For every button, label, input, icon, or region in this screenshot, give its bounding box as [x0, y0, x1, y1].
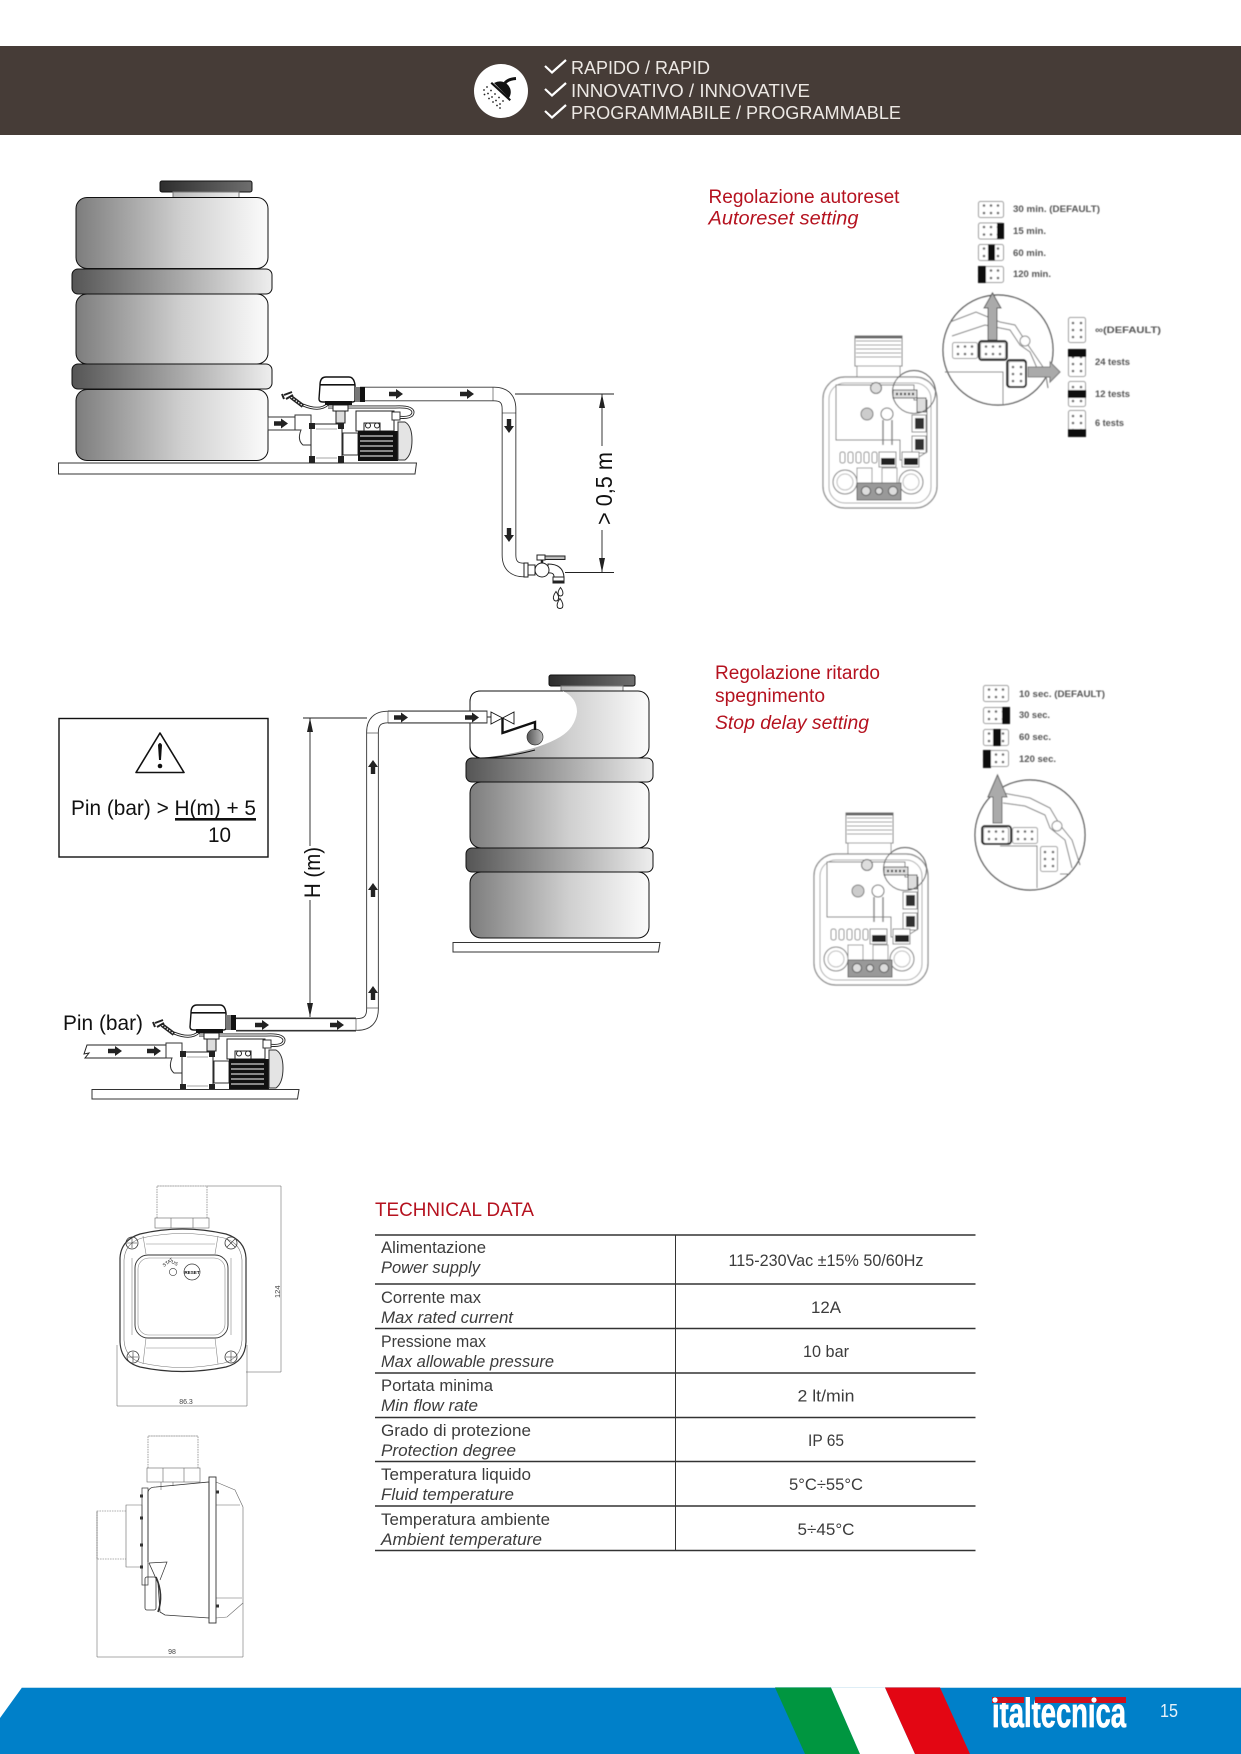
test count legend: 12 tests: [1095, 389, 1130, 400]
icon: warning triangle: [136, 733, 184, 772]
autoreset time legend: 60 min.: [1013, 248, 1046, 259]
test count legend: [1068, 318, 1161, 437]
magnified circle: [975, 775, 1085, 890]
feature list: PROGRAMMABILE / PROGRAMMABLE: [571, 102, 901, 123]
stop delay legend: 30 sec.: [1019, 710, 1050, 721]
heading: technical data: TECHNICAL DATA: [375, 1200, 534, 1221]
feature list: [545, 57, 901, 123]
autoreset time legend: 120 min.: [1013, 269, 1051, 280]
row: ambient temperature: [380, 1510, 854, 1549]
row: fluid temperature: Temperatura liquido: [381, 1465, 531, 1484]
dimension: width 86.3: 86.3: [179, 1399, 193, 1406]
float valve: [487, 712, 543, 745]
technical drawing: front view: [117, 1186, 282, 1406]
row: protection degree: IP 65: [808, 1431, 844, 1450]
technical drawing: side view: [97, 1436, 243, 1657]
tank: [72, 181, 272, 460]
dimension: depth 98: [97, 1559, 243, 1657]
dimension: greater than 0.5 m: > 0,5 m: [591, 452, 617, 525]
dimension: greater than 0.5 m: [515, 394, 617, 572]
dimension: H (m): H (m): [300, 847, 325, 898]
tank with float valve: [466, 675, 653, 938]
inlet pipe: [84, 1045, 172, 1058]
autoreset time legend: [978, 202, 1100, 283]
feature list: INNOVATIVO / INNOVATIVE: [571, 80, 810, 101]
row: max allowable pressure: Pressione max: [381, 1332, 486, 1351]
row: max allowable pressure: [381, 1332, 849, 1371]
italian flag stripes: [775, 1688, 970, 1754]
controller board: [814, 813, 928, 985]
technical drawing: front view: US: [170, 1259, 179, 1268]
pump with controller: [282, 377, 413, 463]
autoreset time legend: 30 min. (DEFAULT): [1013, 204, 1100, 215]
diagram: pump filling raised tank: [63, 675, 660, 1099]
row: protection degree: Grado di protezione: [381, 1421, 531, 1440]
row: max allowable pressure: Max allowable pressure: [381, 1352, 554, 1371]
row: power supply: Power supply: [381, 1258, 481, 1277]
magnified circle: [943, 293, 1060, 405]
row: fluid temperature: [381, 1465, 863, 1504]
row: protection degree: Protection degree: [381, 1441, 516, 1460]
stop delay legend: 10 sec. (DEFAULT): [1019, 689, 1105, 700]
row: power supply: [381, 1238, 924, 1277]
heading: stop delay setting: Regolazione ritardo: [715, 663, 880, 684]
diagram: tank above pump with tap: [58, 181, 617, 608]
riser pipe: [236, 711, 487, 1031]
warning box: [59, 718, 268, 857]
technical drawing: front view: STAT: [162, 1257, 175, 1269]
pump base slab: [92, 1090, 299, 1099]
footer band: [0, 1688, 1241, 1754]
row: power supply: Alimentazione: [381, 1238, 486, 1257]
heading: autoreset setting: [707, 187, 900, 230]
row: max rated current: Max rated current: [381, 1308, 514, 1327]
dimension: H (m): [300, 718, 367, 1017]
stop delay legend: [983, 686, 1105, 768]
dimension: height 124: 124: [273, 1285, 282, 1298]
row: max rated current: [381, 1288, 842, 1327]
logo: italtecnica: italtecnica: [992, 1689, 1126, 1736]
row: min flow rate: Min flow rate: [381, 1396, 478, 1415]
row: min flow rate: [381, 1376, 854, 1415]
stop delay legend: 120 sec.: [1019, 754, 1056, 765]
controller board: [823, 336, 937, 508]
row: ambient temperature: Temperatura ambiente: [381, 1510, 550, 1529]
base slab: [453, 942, 660, 952]
dimension: depth 98: 98: [168, 1649, 176, 1656]
label: inlet pressure: Pin (bar): [63, 1012, 143, 1035]
test count legend: 6 tests: [1095, 418, 1124, 429]
row: max allowable pressure: 10 bar: [803, 1342, 849, 1361]
row: max rated current: Corrente max: [381, 1288, 481, 1307]
diagram: stop delay jumpers: [814, 686, 1105, 985]
row: fluid temperature: 5°C÷55°C: [789, 1475, 863, 1494]
pump with controller: [153, 1005, 284, 1091]
heading: stop delay setting: [715, 663, 880, 734]
icon: shower: [474, 64, 528, 118]
row: max rated current: 12A: [811, 1298, 842, 1317]
logo: italtecnica: [988, 1689, 1130, 1736]
row: power supply: 115-230Vac ±15% 50/60Hz: [728, 1251, 924, 1270]
formula: Pin (bar) > H(m) + 5: [71, 797, 256, 820]
page number: 15: [1160, 1700, 1178, 1721]
inlet pipe: [268, 417, 296, 430]
dimension: height 124: [207, 1186, 282, 1372]
diagram: autoreset jumpers: [823, 202, 1161, 508]
row: min flow rate: Portata minima: [381, 1376, 494, 1395]
table: technical data: [375, 1235, 976, 1550]
heading: autoreset setting: Autoreset setting: [707, 208, 859, 230]
formula: [71, 797, 256, 847]
tap with drops: [524, 555, 565, 608]
top banner: [0, 46, 1241, 135]
heading: autoreset setting: Regolazione autoreset: [708, 187, 900, 208]
row: protection degree: [381, 1421, 844, 1460]
feature list: RAPIDO / RAPID: [571, 57, 710, 78]
row: min flow rate: 2 lt/min: [798, 1386, 854, 1406]
row: ambient temperature: Ambient temperature: [380, 1530, 542, 1549]
dimension: width 86.3: [117, 1345, 247, 1406]
autoreset time legend: 15 min.: [1013, 226, 1046, 237]
stop delay legend: 60 sec.: [1019, 732, 1051, 743]
heading: stop delay setting: Stop delay setting: [715, 713, 869, 734]
base slab: [58, 463, 416, 474]
test count legend: ∞(DEFAULT): [1095, 325, 1161, 336]
row: ambient temperature: 5÷45°C: [798, 1520, 854, 1539]
test count legend: 24 tests: [1095, 357, 1130, 368]
technical drawing: front view: RESET: [184, 1270, 200, 1275]
heading: stop delay setting: spegnimento: [715, 686, 825, 707]
delivery pipe: [360, 388, 524, 570]
row: fluid temperature: Fluid temperature: [381, 1485, 514, 1504]
formula: 10: [208, 824, 231, 847]
